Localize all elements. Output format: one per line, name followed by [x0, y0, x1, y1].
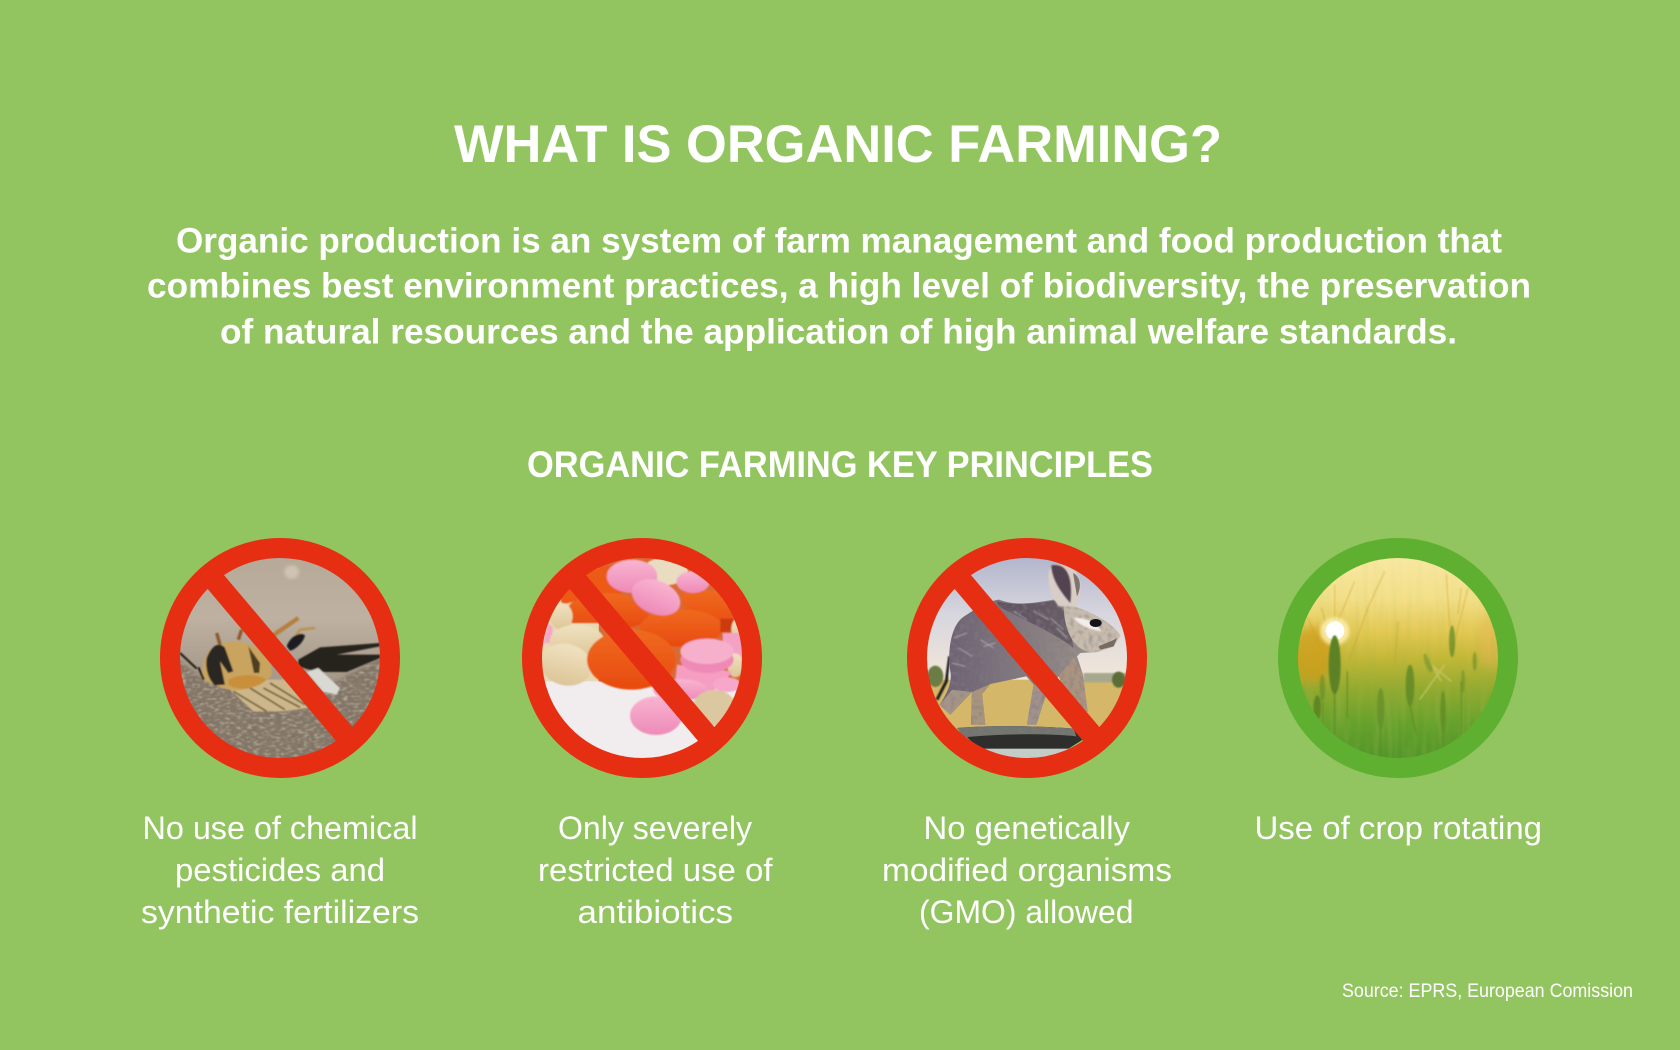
intro text block	[147, 222, 1531, 352]
caption: synthetic fertilizers	[141, 894, 419, 930]
icon: pills photo with prohibition sign	[532, 548, 752, 768]
prohibition ring and bar	[917, 548, 1137, 768]
title: WHAT IS ORGANIC FARMING?	[454, 115, 1222, 174]
green ring	[1288, 548, 1508, 768]
caption	[882, 810, 1172, 930]
caption	[141, 810, 419, 930]
caption: restricted use of	[538, 852, 773, 888]
prohibition ring and bar	[170, 548, 390, 768]
intro text block: Organic production is an system of farm management and food production that	[176, 222, 1502, 260]
caption: No genetically	[924, 810, 1130, 846]
section heading: ORGANIC FARMING KEY PRINCIPLES	[527, 444, 1153, 485]
intro text block: combines best environment practices, a high level of biodiversity, the preservation	[147, 266, 1531, 306]
intro text block: of natural resources and the application of high animal welfare standards.	[220, 312, 1457, 352]
prohibition ring and bar	[532, 548, 752, 768]
caption: No use of chemical	[142, 810, 418, 846]
icon: dead bee photo with prohibition sign	[170, 548, 390, 768]
panel: no GMO	[882, 548, 1172, 930]
panel: restricted antibiotics	[532, 548, 773, 930]
panel: crop rotation	[1254, 548, 1542, 846]
caption: Only severely	[558, 810, 752, 846]
caption: modified organisms	[882, 852, 1172, 888]
caption	[538, 810, 773, 930]
caption: Use of crop rotating	[1254, 810, 1542, 846]
caption: pesticides and	[175, 852, 385, 888]
caption: (GMO) allowed	[919, 894, 1134, 930]
caption: antibiotics	[578, 894, 733, 930]
icon: rabbit photo with prohibition sign	[917, 548, 1137, 768]
icon: wheat field photo in green ring	[1288, 548, 1508, 768]
source note: Source: EPRS, European Comission	[1342, 980, 1633, 1002]
panel: no pesticides	[141, 548, 419, 930]
